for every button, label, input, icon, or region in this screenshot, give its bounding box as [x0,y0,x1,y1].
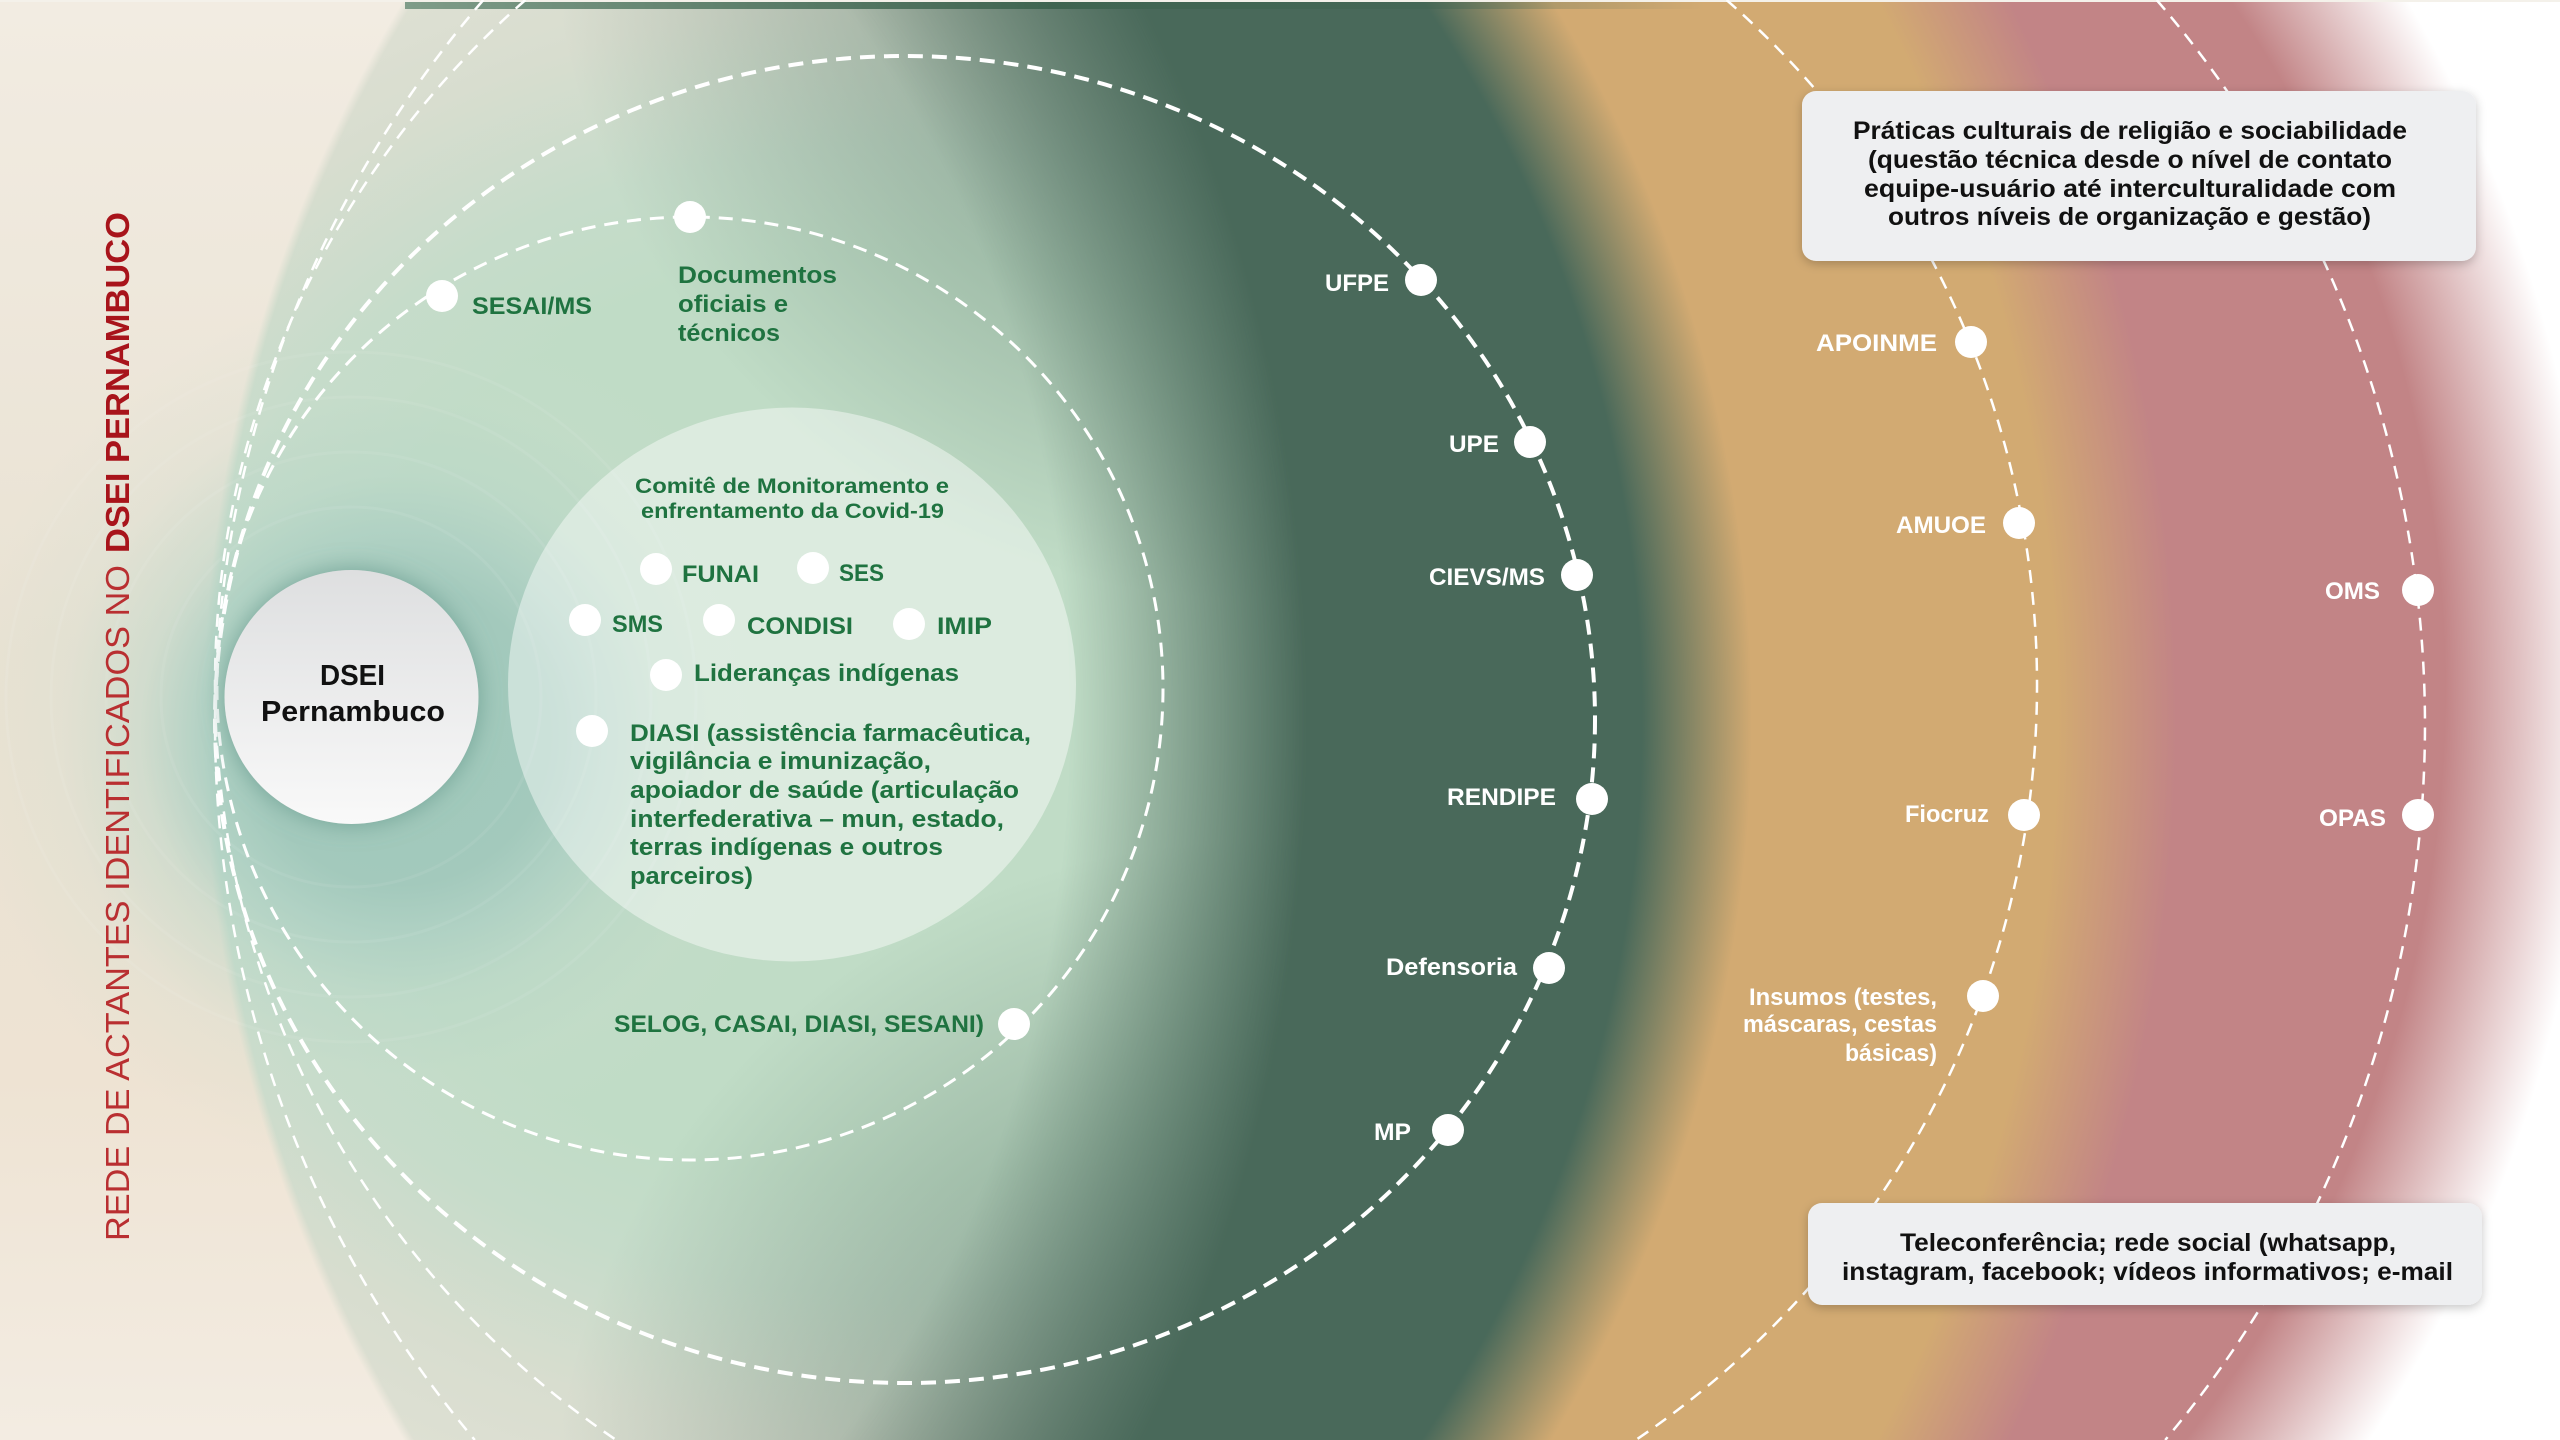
actant: Insumos [1743,980,1999,1067]
actant: DIASI: parceiros) [630,863,753,890]
actant: FUNAI [640,553,759,588]
actant: Documentos oficiais e técnicos: técnicos [678,320,780,347]
actant: Documentos oficiais e técnicos [674,201,837,347]
actant: CONDISI [703,604,853,640]
actant: SELOG, CASAI, DIASI, SESANI: SELOG, CASAI, DIASI, SESANI) [614,1011,984,1038]
actant: OMS: OMS [2325,578,2380,605]
actant: APOINME [1816,326,1987,358]
actant: MP [1374,1114,1464,1146]
actant: SES [797,552,884,587]
actant: Fiocruz: Fiocruz [1905,801,1989,828]
central node: DSEI Pernambuco: DSEI [320,660,385,692]
title: vertical heading: DSEI PERNAMBUCO [99,212,136,553]
actant: Insumos: básicas) [1845,1040,1937,1067]
actant: DIASI [576,715,1031,890]
actant: FUNAI: FUNAI [682,561,759,588]
actant: SESAI/MS: SESAI/MS [472,293,592,320]
actant: SESAI/MS [426,280,592,320]
callout: práticas culturais: (questão técnica desde o nível de contato [1868,146,2392,174]
actant: DIASI: interfederativa – mun, estado, [630,806,1004,833]
actant: RENDIPE: RENDIPE [1447,784,1556,811]
actant: OPAS: OPAS [2319,805,2386,832]
actant: UFPE: UFPE [1325,270,1389,297]
panel: Comitê de Monitoramento [508,408,1076,962]
actant: IMIP: IMIP [937,613,992,640]
actant: SES: SES [839,560,884,587]
heading: comitê [635,475,949,523]
callout: teleconferência: instagram, facebook; vídeos informativos; e-mail [1842,1258,2453,1286]
title: vertical heading [99,212,136,1241]
actant: Insumos: máscaras, cestas [1743,1011,1937,1038]
actant: Defensoria [1386,952,1565,984]
actant: Documentos oficiais e técnicos: Documentos [678,262,837,289]
actant: CONDISI: CONDISI [747,613,853,640]
actant: Defensoria: Defensoria [1386,954,1518,981]
actant: CIEVS/MS: CIEVS/MS [1429,564,1545,591]
callout: teleconferência [1808,1203,2482,1305]
actant: UPE: UPE [1449,431,1499,458]
heading: comitê: Comitê de Monitoramento e [635,475,949,498]
actant: OPAS [2319,799,2434,832]
actant: CIEVS/MS [1429,559,1593,591]
actant: Insumos: Insumos (testes, [1749,984,1937,1011]
actant: AMUOE [1896,507,2035,539]
actant: UPE [1449,426,1546,458]
actant: OMS [2325,574,2434,606]
actant: Fiocruz [1905,799,2040,831]
callout: práticas culturais: equipe-usuário até interculturalidade com [1864,175,2396,203]
actant: RENDIPE [1447,783,1608,815]
callout: práticas culturais: Práticas culturais de religião e sociabilidade [1853,117,2407,145]
actant: DIASI: apoiador de saúde (articulação [630,777,1019,804]
actant: APOINME: APOINME [1816,330,1937,357]
actant: DIASI: DIASI (assistência farmacêutica, [630,720,1031,747]
actant: UFPE [1325,264,1437,297]
actant: Lideranças indígenas: Lideranças indígenas [694,660,959,687]
callout: teleconferência: Teleconferência; rede social (whatsapp, [1900,1229,2396,1257]
actant: SMS [569,604,663,638]
actant: Documentos oficiais e técnicos: oficiais e [678,291,788,318]
actant: DIASI: terras indígenas e outros [630,834,943,861]
actant: IMIP [893,608,992,640]
title: vertical heading: REDE DE ACTANTES IDENTIFICADOS NO [99,565,136,1241]
central node: DSEI Pernambuco: Pernambuco [261,696,445,728]
heading: comitê: enfrentamento da Covid-19 [641,500,944,523]
actant: MP: MP [1374,1119,1411,1146]
actant: DIASI: vigilância e imunização, [630,748,931,775]
callout: práticas culturais [1802,91,2476,261]
callout: práticas culturais: outros níveis de organização e gestão) [1888,203,2371,231]
actant: SMS: SMS [612,611,663,638]
actant: AMUOE: AMUOE [1896,512,1986,539]
central node: DSEI Pernambuco [224,570,478,824]
actant: Lideranças indígenas [650,659,959,691]
